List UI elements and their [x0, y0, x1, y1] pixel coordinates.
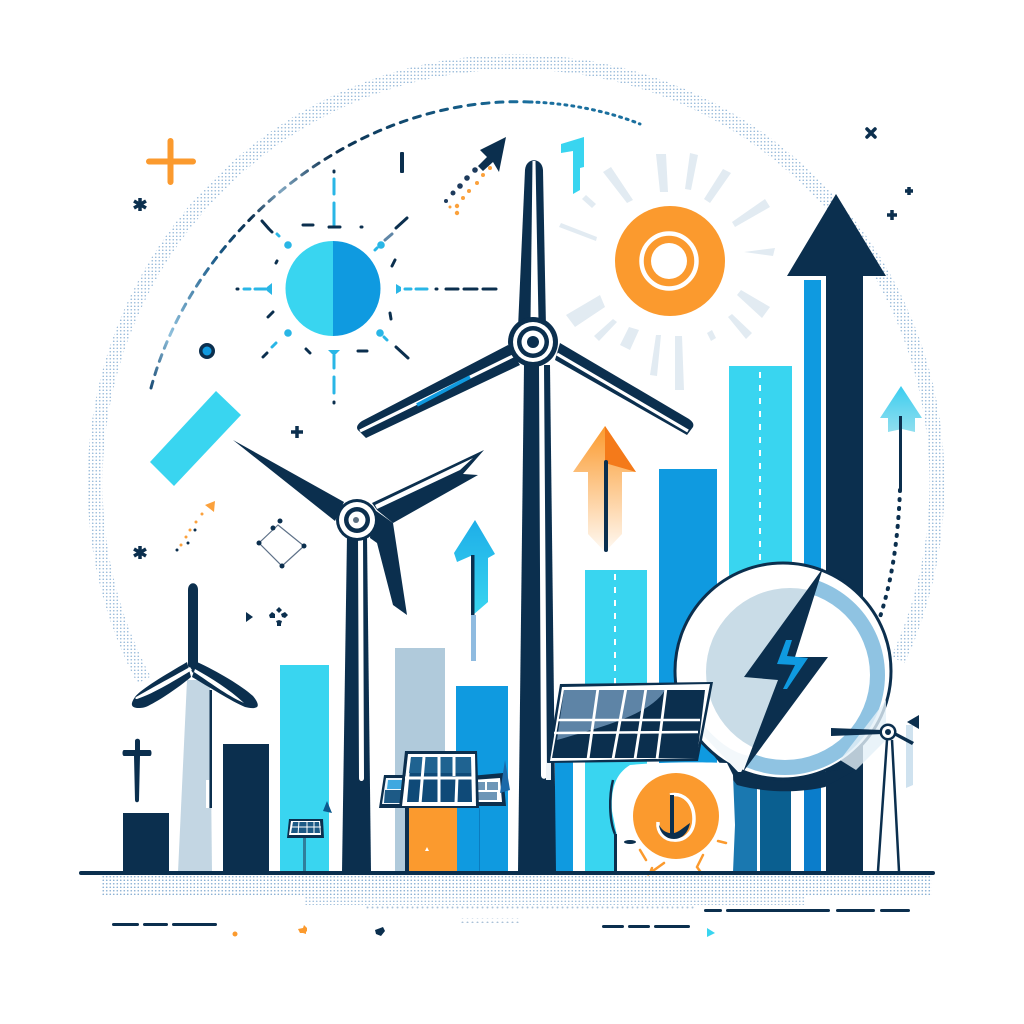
bar 7	[659, 469, 717, 872]
icon: small cross pole	[122, 739, 152, 802]
bar 1	[123, 813, 169, 872]
bar 9	[804, 280, 821, 872]
decorative sparkles	[134, 129, 913, 936]
icon: blue ring dot	[199, 343, 215, 359]
wind turbine: large center	[357, 160, 693, 872]
icon: cyan tick shape	[561, 137, 584, 194]
illustration: renewable energy growth	[79, 54, 944, 937]
bar 3	[280, 665, 329, 872]
lower blue bars	[555, 760, 821, 872]
dotted arc: right	[880, 490, 900, 617]
front panel	[399, 751, 479, 808]
tiny solar panel	[287, 801, 332, 872]
bar 5	[456, 686, 508, 872]
bar 4	[395, 648, 445, 872]
wind turbine: middle	[233, 440, 484, 872]
sun: orange with rays	[559, 153, 775, 390]
bar 6	[585, 570, 647, 872]
arrow: large navy growth arrow	[787, 194, 886, 872]
rays	[237, 171, 496, 403]
shape: cyan diagonal bar	[150, 391, 241, 486]
bottom accents	[112, 909, 910, 937]
solar panel: large	[546, 682, 713, 780]
bar 8	[729, 366, 792, 576]
wind turbine: small right	[831, 715, 919, 871]
wind turbine: small left	[132, 583, 258, 872]
lightning bolt	[743, 568, 828, 772]
arrow: navy dotted diagonal	[444, 137, 506, 215]
ground line	[79, 871, 935, 875]
sun: split blue	[237, 171, 496, 403]
arrow: cyan upper right	[880, 386, 922, 490]
bar 2	[223, 744, 269, 872]
icon: orange plus	[149, 141, 193, 182]
arrow: orange gradient	[573, 426, 636, 552]
dotted ground band	[102, 875, 932, 923]
solar badge: orange clock icon	[610, 762, 735, 874]
small network glyph	[256, 518, 306, 568]
solar station: orange base with panels	[379, 751, 510, 872]
bar chart: rising bars	[123, 280, 821, 872]
dotted arc: top	[151, 102, 640, 388]
energy badge: lightning circle	[675, 563, 891, 791]
dotted halo ring	[95, 62, 937, 680]
side panels	[379, 775, 409, 808]
arrow: blue upward	[454, 520, 495, 661]
small arrow: orange dotted	[176, 501, 215, 552]
